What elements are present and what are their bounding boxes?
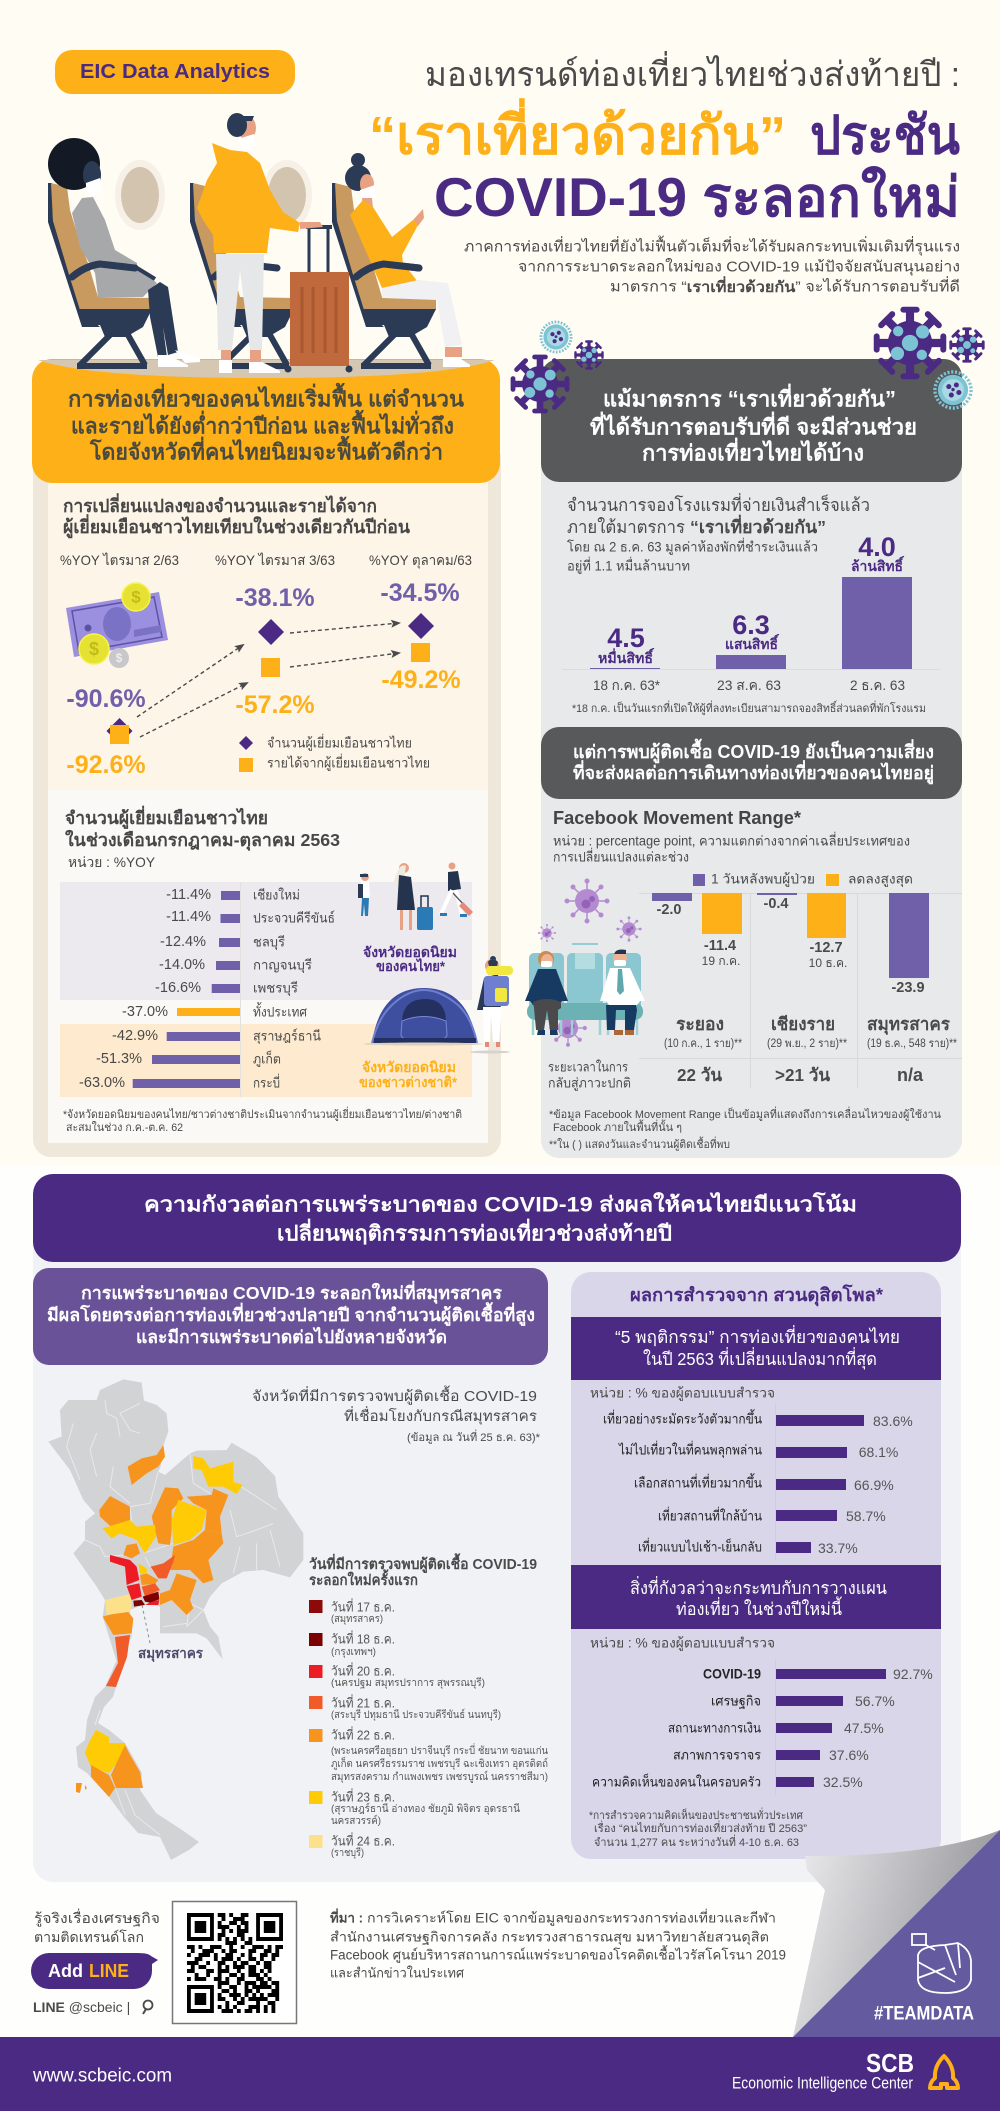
chart: yoy markers and arrows [66,579,461,779]
line promo: LINE [89,1961,129,1981]
footer bar: SCB [866,2048,914,2078]
legend: first detection dates: (สมุทรสาคร) [331,1613,383,1625]
bar chart: provinces yoy: กระบี่ [253,1074,280,1090]
bar chart: provinces yoy: -63.0% [79,1075,125,1091]
heading: hotel booking: โดย ณ 2 ธ.ค. 63 มูลค่าห้องพักที่ชำระเงินแล้ว [567,538,818,556]
bar chart: provinces yoy: กาญจนบุรี [253,958,312,974]
bar chart: movement range: ระยอง [676,1014,724,1034]
bar chart: movement range: -2.0 [656,902,682,918]
title: COVID-19 ระลอกใหม่ [434,165,960,228]
bar chart: provinces yoy: -37.0% [122,1004,168,1020]
bar chart: movement range: 19 ก.ค. [702,954,740,968]
footnote: survey: *การสำรวจความคิดเห็นของประชาชนทั่วประเทศ [589,1807,803,1822]
line promo [31,1909,160,2015]
chart: yoy markers and arrows: -57.2% [235,691,315,719]
bar chart: movement range: -0.4 [764,896,788,912]
icon: scb logo [930,2056,958,2088]
panel: samut sakhon header: การแพร่ระบาดของ COVID-19 ระลอกใหม่ที่สมุทรสาคร [81,1280,503,1304]
legend: first detection dates: วันที่ 22 ธ.ค. [331,1726,395,1742]
bar chart: provinces yoy: ประจวบคีรีขันธ์ [253,910,335,926]
legend: movement chart: ลดลงสูงสุด [848,872,913,888]
legend: first detection dates: วันที่มีการตรวจพบผู้ติดเชื้อ COVID-19 [309,1553,537,1573]
heading: provinces chart: ในช่วงเดือนกรกฎาคม-ตุลาคม 2563 [65,829,340,851]
bar chart: provinces yoy: -42.9% [112,1028,158,1044]
footnote: left panel [63,1106,462,1134]
column headers [60,552,472,569]
bar chart: worries: 56.7% [855,1693,895,1709]
panel: lower section background [33,1200,961,1882]
bar chart: movement range: สมุทรสาคร [867,1014,951,1035]
panel: left orange header: และรายได้ยังต่ำกว่าปีก่อน และฟื้นไม่ทั่วถึง [71,410,454,438]
title: “เราเที่ยวด้วยกัน” [369,98,786,166]
legend: first detection dates: (ราชบุรี) [331,1846,364,1859]
column headers: %YOY ตุลาคม/63 [369,552,472,569]
bar chart: bookings: แสนสิทธิ์ [725,633,780,652]
panel: risk header: ที่จะส่งผลต่อการเดินทางท่องเที่ยวของคนไทยอยู่ [573,760,934,785]
heading: hotel booking [567,493,870,574]
bar chart: bookings [562,532,940,693]
legend: first detection dates: วันที่ 23 ธ.ค. [331,1788,395,1804]
heading: hotel booking: จำนวนการจองโรงแรมที่จ่ายเงินสำเร็จแล้ว [567,493,870,515]
chart: yoy markers and arrows: -92.6% [66,751,146,779]
footer bar [0,2037,1000,2111]
legend: first detection dates: (กรุงเทพฯ) [331,1646,376,1658]
bar chart: bookings: 2 ธ.ค. 63 [850,677,905,693]
legend: first detection dates [309,1553,548,1859]
panel: left orange header: การท่องเที่ยวของคนไทยเริ่มฟื้น แต่จำนวน [68,382,464,412]
bar chart: behaviours: 58.7% [846,1508,886,1524]
footnote: movement range [549,1106,941,1151]
bar chart: provinces yoy [60,882,472,1097]
bar chart: movement range: (29 พ.ย., 2 ราย)** [767,1038,847,1050]
chart: yoy markers and arrows: -49.2% [381,666,461,694]
illustration: passengers distanced on seats [525,878,645,1047]
legend: visitors and revenue: จำนวนผู้เยี่ยมเยือนชาวไทย [267,734,412,752]
unit note: หน่วย : % ของผู้ตอบแบบสำรวจ [590,1386,775,1402]
icon: banknote and coins [66,583,168,668]
illustration: tent and backpacker [363,956,513,1054]
icon: team data [912,1934,971,1993]
column headers: %YOY ไตรมาส 2/63 [60,552,179,568]
chart: yoy markers and arrows: -38.1% [235,584,315,612]
banner: behaviour change: ความกังวลต่อการแพร่ระบาดของ COVID-19 ส่งผลให้คนไทยมีแนวโน้ม [144,1192,857,1216]
bar chart: provinces yoy: -16.6% [155,980,201,996]
banner: behaviour change [33,1174,961,1262]
bar chart: behaviours: ไม่ไปเที่ยวในที่คนพลุกพล่าน [618,1440,762,1458]
bar chart: worries [592,1660,933,1795]
bar chart: movement range: -23.9 [891,980,925,996]
bar chart: provinces yoy: ทั้งประเทศ [253,1002,307,1020]
intro text: จากการระบาดระลอกใหม่ของ COVID-19 แม้ปัจจัยสนับสนุนอย่าง [518,258,960,276]
source text: สำนักงานเศรษฐกิจการคลัง กระทรวงสาธารณสุข มหาวิทยาลัยสวนดุสิต [330,1930,769,1946]
bar chart: provinces yoy: เพชรบุรี [253,980,298,996]
bar chart: movement range: -11.4 [704,938,736,954]
source text: และสำนักข่าวในประเทศ [330,1964,464,1980]
footnote: survey [589,1807,807,1849]
bar chart: movement range: >21 วัน [775,1065,830,1085]
bar chart: worries: 47.5% [844,1720,884,1736]
map: thailand [48,1379,303,1860]
bar chart: bookings: 18 ก.ค. 63* [593,677,661,693]
footnote: movement range: Facebook ภายในพื้นที่นั้น ๆ [553,1119,682,1134]
band: worries [571,1565,941,1629]
footnote: movement range: **ใน ( ) แสดงวันและจำนวนผู้ติดเชื้อที่พบ [549,1136,730,1151]
bar chart: bookings: ล้านสิทธิ์ [851,555,905,574]
bar chart: bookings: 23 ส.ค. 63 [717,677,781,693]
footnote: left panel: *จังหวัดยอดนิยมของคนไทย/ชาวต่างชาติประเมินจากจำนวนผู้เยี่ยมเยือนชาวไทย/ต่างชาติ [63,1106,462,1121]
footnote: survey: เรื่อง “คนไทยกับการท่องเที่ยวส่งท้าย ปี 2563” [594,1820,807,1835]
intro text: มาตรการ “ เราเที่ยวด้วยกัน ” จะได้รับการตอบรับที่ดี [610,276,960,296]
label: popular foreign: จังหวัดยอดนิยม [362,1059,456,1075]
heading: survey: ผลการสำรวจจาก สวนดุสิตโพล* [630,1284,883,1307]
bar chart: worries: เศรษฐกิจ [711,1694,761,1710]
label: team data: #TEAMDATA [874,2004,974,2024]
bar chart: movement range: 22 วัน [677,1065,722,1085]
bar chart: movement range: ระยะเวลาในการ [548,1058,628,1074]
badge: EIC Data Analytics: EIC Data Analytics [80,61,270,83]
panel: survey [571,1272,941,1859]
bar chart: provinces yoy: -11.4% [166,887,211,903]
bar chart: movement range: กลับสู่ภาวะปกติ [548,1076,631,1092]
bar chart: behaviours: 83.6% [873,1413,913,1429]
panel: right grey header [541,359,962,482]
bar chart: movement range: n/a [897,1065,924,1085]
panel: risk header [541,727,962,799]
illustration: airplane cabin passengers [48,113,470,373]
line promo: ตามติดเทรนด์โลก [34,1929,144,1945]
bar chart: behaviours: เลือกสถานที่เที่ยวมากขึ้น [634,1472,762,1490]
heading: thai visitor change [63,493,411,539]
label: popular thai: ของคนไทย* [376,957,446,974]
bar chart: provinces yoy: -14.0% [159,957,205,973]
bar chart: provinces yoy: ชลบุรี [253,934,285,950]
source text: การวิเคราะห์โดย EIC จากข้อมูลของกระทรวงการท่องเที่ยวและกีฬา [367,1908,776,1926]
bar chart: behaviours: 33.7% [818,1540,858,1556]
heading: hotel booking: อยู่ที่ 1.1 หมื่นล้านบาท [567,556,690,574]
heading: provinces chart: จำนวนผู้เยี่ยมเยือนชาวไทย [65,805,268,830]
bar chart: behaviours: เที่ยวแบบไปเช้า-เย็นกลับ [638,1538,762,1554]
chart: yoy markers and arrows: -34.5% [380,579,460,607]
bar chart: provinces yoy: สุราษฎร์ธานี [253,1028,321,1044]
bar chart: bookings: 6.3 [732,610,770,640]
band: five behaviours: “5 พฤติกรรม” การท่องเที่ยวของคนไทย [615,1325,900,1347]
footnote: movement range: *ข้อมูล Facebook Movement Range เป็นข้อมูลที่แสดงถึงการเคลื่อนไหวของผู้ใช้งาน [549,1106,941,1121]
legend: first detection dates: วันที่ 20 ธ.ค. [331,1662,395,1678]
legend: first detection dates: ระลอกใหม่ครั้งแรก [309,1569,418,1589]
corner: page curl [793,1830,1000,2037]
legend: first detection dates: (สุราษฎร์ธานี อ่างทอง ชัยภูมิ พิจิตร อุดรธานี [331,1802,520,1815]
band: worries: ท่องเที่ยว ในช่วงปีใหม่นี้ [676,1596,842,1619]
line promo: LINE @scbeic | [33,1999,130,2015]
bar chart: provinces yoy: -12.4% [160,934,206,950]
footnote: bookings: *18 ก.ค. เป็นวันแรกที่เปิดให้ผู้ที่ลงทะเบียนสามารถจองสิทธิ์ส่วนลดที่พักโรงแรม [572,700,926,715]
legend: first detection dates: ภูเก็ต นครศรีธรรมราช เพชรบุรี ฉะเชิงเทรา อุตรดิตถ์ [331,1756,548,1770]
label: popular foreign: ของชาวต่างชาติ* [359,1074,458,1090]
heading: provinces chart: หน่วย : %YOY [68,854,156,870]
footnote: left panel: สะสมในช่วง ก.ค.-ต.ค. 62 [66,1121,183,1134]
footer bar: Economic Intelligence Center [732,2074,913,2092]
bar chart: provinces yoy: -51.3% [96,1051,142,1067]
bar chart: movement range: (19 ธ.ค., 548 ราย)** [867,1038,957,1050]
panel: samut sakhon header [33,1268,548,1365]
heading: provinces chart [65,805,340,870]
heading: hotel booking: ภายใต้มาตรการ [567,517,685,537]
bar chart: provinces yoy: เชียงใหม่ [253,886,300,902]
panel: risk header: แต่การพบผู้ติดเชื้อ COVID-19 ยังเป็นความเสี่ยง [573,738,934,764]
footer bar: www.scbeic.com [32,2066,172,2086]
bar chart: worries: สภาพการจราจร [673,1748,761,1762]
bar chart: worries: สถานะทางการเงิน [668,1720,761,1736]
bar chart: movement range [548,893,962,1092]
line promo: Add [48,1961,83,1981]
bar chart: movement range: เชียงราย [771,1014,835,1034]
legend: first detection dates: วันที่ 24 ธ.ค. [331,1832,395,1848]
legend: visitors and revenue [239,734,430,772]
label: popular thai [363,944,457,974]
band: five behaviours: ในปี 2563 ที่เปลี่ยนแปลงมากที่สุด [643,1347,877,1370]
bar chart: behaviours: 66.9% [854,1477,894,1493]
panel: right grey header: การท่องเที่ยวไทยได้บ้าง [642,436,864,466]
legend: movement chart: 1 วันหลังพบผู้ป่วย [711,872,815,888]
icon: banknote and coins: $ [116,651,123,665]
bar chart: worries: 32.5% [823,1774,863,1790]
banner: behaviour change: เปลี่ยนพฤติกรรมการท่องเที่ยวช่วงส่งท้ายปี [277,1218,672,1246]
heading: thai visitor change: การเปลี่ยนแปลงของจำนวนและรายได้จาก [63,493,377,516]
intro text: ภาคการท่องเที่ยวไทยที่ยังไม่ฟื้นตัวเต็มที่จะได้รับผลกระทบเพิ่มเติมที่รุนแรง [464,236,960,256]
bar chart: worries: 37.6% [829,1747,869,1763]
panel: samut sakhon header: และมีการแพร่ระบาดต่อไปยังหลายจังหวัด [136,1326,447,1347]
heading: facebook movement range: หน่วย : percentage point, ความแตกต่างจากค่าเฉลี่ยประเทศของ [553,832,910,848]
icon: banknote and coins: $ [89,639,99,659]
heading: map: ที่เชื่อมโยงกับกรณีสมุทรสาคร [344,1406,537,1425]
bar chart: worries: COVID-19 [703,1666,761,1682]
title: ประชัน [810,106,960,166]
band: worries: สิ่งที่กังวลว่าจะกระทบกับการวางแผน [630,1576,887,1598]
label: popular thai: จังหวัดยอดนิยม [363,944,457,960]
map: thailand: สมุทรสาคร [138,1645,203,1662]
qr code [172,1902,296,2024]
bar chart: movement range: (10 ก.ค., 1 ราย)** [664,1038,742,1050]
legend: first detection dates: (นครปฐม สมุทรปราการ สุพรรณบุรี) [331,1676,485,1689]
bar chart: worries: ความคิดเห็นของคนในครอบครัว [592,1772,761,1790]
intro text [464,236,960,296]
bar chart: worries: 92.7% [893,1666,933,1682]
band: five behaviours [571,1317,941,1380]
bar chart: movement range: -12.7 [809,940,843,956]
heading: facebook movement range: Facebook Movement Range* [553,808,801,828]
heading: thai visitor change: ผู้เยี่ยมเยือนชาวไทยเทียบในช่วงเดียวกันปีก่อน [63,514,411,539]
panel: right grey header: แม้มาตรการ “เราเที่ยวด้วยกัน” [603,382,896,412]
heading: facebook movement range: การเปลี่ยนแปลงแต่ละช่วง [553,848,689,864]
legend: first detection dates: วันที่ 17 ธ.ค. [331,1598,395,1614]
legend: first detection dates: วันที่ 21 ธ.ค. [331,1694,395,1710]
panel: samut sakhon header: มีผลโดยตรงต่อการท่องเที่ยวช่วงปลายปี จากจำนวนผู้ติดเชื้อที่สูง [47,1302,535,1327]
icon: banknote and coins: $ [131,588,141,606]
bar chart: behaviours: เที่ยวสถานที่ใกล้บ้าน [658,1506,762,1524]
bar chart: movement range: 10 ธ.ค. [809,956,847,970]
source text [330,1908,786,1980]
label: popular foreign [359,1059,458,1090]
chart: yoy markers and arrows: -90.6% [66,685,146,713]
legend: movement chart [693,872,913,888]
title [369,51,960,228]
panel: left orange header: โดยจังหวัดที่คนไทยนิยมจะฟื้นตัวดีกว่า [89,436,443,464]
title: มองเทรนด์ท่องเที่ยวไทยช่วงส่งท้ายปี : [425,51,960,94]
legend: first detection dates: (สระบุรี ปทุมธานี ประจวบคีรีขันธ์ นนทบุรี) [331,1708,501,1721]
column headers: %YOY ไตรมาส 3/63 [215,552,335,568]
bar chart: behaviours [603,1404,913,1560]
bar chart: bookings: หมื่นสิทธิ์ [598,647,655,666]
heading: facebook movement range [553,808,910,864]
legend: first detection dates: (พระนครศรีอยุธยา ปราจีนบุรี กระบี่ ชัยนาท ขอนแก่น [331,1743,548,1757]
panel: left orange header [32,359,500,483]
heading: map [252,1385,541,1444]
legend: visitors and revenue: รายได้จากผู้เยี่ยมเยือนชาวไทย [267,754,430,772]
legend: first detection dates: วันที่ 18 ธ.ค. [331,1630,395,1646]
legend: first detection dates: นครสวรรค์) [331,1814,381,1827]
source text: Facebook ศูนย์บริหารสถานการณ์แพร่ระบาดของโรคติดเชื้อไวรัสโคโรนา 2019 [330,1944,786,1964]
bar chart: provinces yoy: ภูเก็ต [253,1050,281,1068]
bar chart: behaviours: 68.1% [859,1444,898,1460]
bar chart: bookings: 4.5 [607,623,645,653]
line promo: รู้จริงเรื่องเศรษฐกิจ [34,1909,160,1927]
panel: left body [33,440,501,1157]
panel: right body [541,440,962,1158]
footnote: survey: จำนวน 1,277 คน ระหว่างวันที่ 4-10 ธ.ค. 63 [594,1834,799,1849]
bar chart: behaviours: เที่ยวอย่างระมัดระวังตัวมากขึ้น [603,1408,762,1426]
heading: map: (ข้อมูล ณ วันที่ 25 ธ.ค. 63)* [407,1429,541,1444]
illustration: travellers [358,862,473,930]
badge: EIC Data Analytics [55,50,295,94]
bar chart: bookings: 4.0 [858,532,896,562]
legend: first detection dates: สมุทรสงคราม กำแพงเพชร เพชรบูรณ์ นครราชสีมา) [331,1770,548,1783]
bar chart: provinces yoy: -11.4% [166,909,211,925]
source text: ที่มา : [330,1908,363,1926]
unit note: หน่วย : % ของผู้ตอบแบบสำรวจ [590,1636,775,1652]
heading: map: จังหวัดที่มีการตรวจพบผู้ติดเชื้อ COVID-19 [252,1385,537,1405]
heading: hotel booking: “เราเที่ยวด้วยกัน” [690,514,826,537]
panel: right grey header: ที่ได้รับการตอบรับที่ดี จะมีส่วนช่วย [590,410,917,440]
icons: viruses [513,310,983,411]
